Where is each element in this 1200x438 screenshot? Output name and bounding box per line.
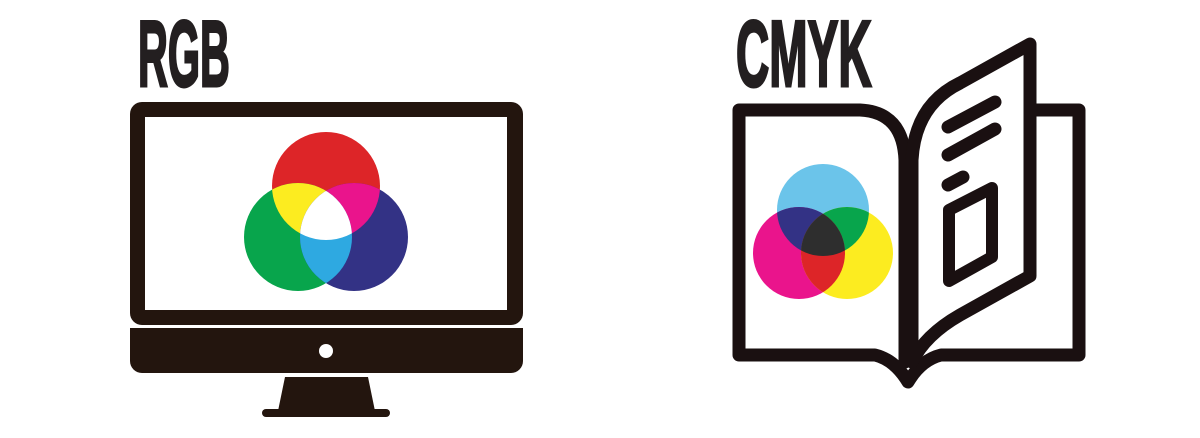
title: CMYK: CMYK [736,1,872,106]
text lines on page [948,102,995,185]
chart: CMYK venn [753,164,893,299]
title: RGB: RGB [138,2,230,107]
picture box on page [949,188,992,281]
icon: open book [739,44,1079,382]
icon: monitor [130,102,523,417]
chart: RGB venn [244,132,408,291]
